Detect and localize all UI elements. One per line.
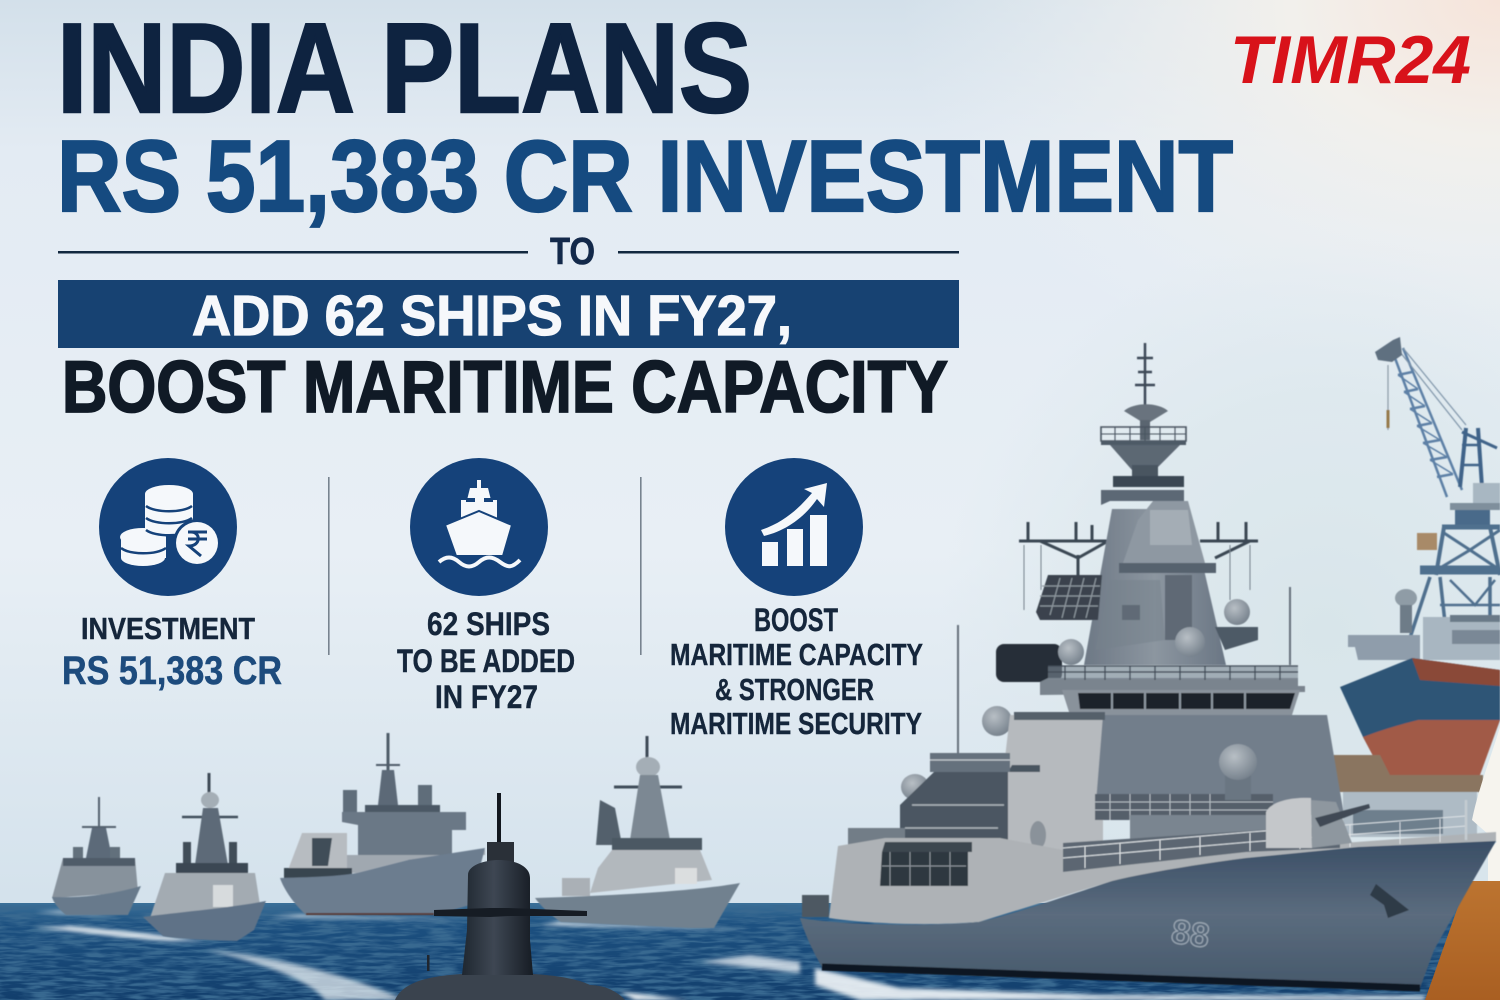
icon: growth chart: [725, 458, 863, 596]
sea: [0, 903, 1500, 1000]
stat: ships: [397, 606, 575, 715]
rear light hull: [829, 832, 1496, 924]
aft recess: [880, 852, 968, 886]
diving planes: [434, 908, 587, 917]
icon: investment coins: [99, 458, 237, 596]
crane tower head: [1460, 428, 1497, 487]
tower: [1084, 509, 1226, 665]
thin masts: [958, 587, 1290, 755]
upper mast stack: [1124, 404, 1168, 422]
cargo crate and cream sail at right edge: [1425, 727, 1500, 1000]
drum radar: [996, 644, 1062, 682]
domes: [901, 599, 1250, 800]
stat: capacity: MARITIME SECURITY: [670, 706, 922, 741]
submarine hull: [395, 973, 625, 1000]
foredeck band: [1063, 825, 1340, 872]
gun barrel: [1315, 804, 1370, 827]
title line 1: INDIA PLANS: [57, 0, 752, 139]
crane boom: [1388, 348, 1466, 497]
radar mesh: [1036, 575, 1102, 620]
anchor: [1370, 884, 1409, 918]
dock base: [1333, 755, 1483, 792]
bridge deck: [1040, 678, 1305, 695]
main warship: [800, 343, 1496, 988]
stat: capacity: MARITIME CAPACITY: [670, 637, 923, 672]
stat: capacity: [670, 602, 923, 741]
connector: TO: TO: [550, 231, 595, 273]
submarine: [395, 793, 625, 1000]
crane gantry: [1405, 527, 1500, 653]
divider: [328, 477, 330, 655]
icon: ship: [410, 458, 548, 596]
logo: TIMR24: TIMR24: [1230, 22, 1471, 98]
dark hull: [800, 841, 1496, 988]
warship 2: [143, 773, 266, 941]
stat: capacity: BOOST: [754, 602, 838, 638]
waterline: [822, 967, 1420, 988]
stat: investment: RS 51,383 CR: [62, 649, 282, 693]
main superstructure: [992, 715, 1103, 870]
stat: ships: TO BE ADDED: [397, 643, 575, 679]
periscope: [497, 793, 501, 863]
subtitle: BOOST MARITIME CAPACITY: [62, 347, 948, 428]
dock ship superstructure: [1423, 617, 1500, 660]
title line 2: RS 51,383 CR INVESTMENT: [57, 121, 1233, 233]
bridge windows: [1078, 693, 1295, 709]
warship 1 (far left): [52, 797, 141, 915]
stat: capacity: & STRONGER: [715, 672, 874, 707]
warship 3 (auxiliary): [280, 733, 485, 915]
gun turret: [1266, 798, 1312, 848]
stat: ships: 62 SHIPS: [427, 606, 550, 642]
banner: [58, 280, 959, 348]
lower deck rails: [1095, 794, 1273, 820]
aft superstructure: [930, 753, 1010, 772]
warship 4: [535, 736, 740, 928]
crane and shipyard: [1333, 337, 1500, 837]
masthead: [1135, 343, 1155, 405]
banner: ADD 62 SHIPS IN FY27,: [192, 284, 792, 348]
dock ship hull: [1340, 658, 1500, 773]
hull number: 88: [1169, 913, 1212, 956]
radar arms: [1019, 522, 1258, 610]
stat: investment: INVESTMENT: [81, 611, 255, 646]
sail: [462, 860, 533, 975]
stat: investment: [62, 611, 282, 693]
stat: ships: IN FY27: [435, 679, 538, 715]
